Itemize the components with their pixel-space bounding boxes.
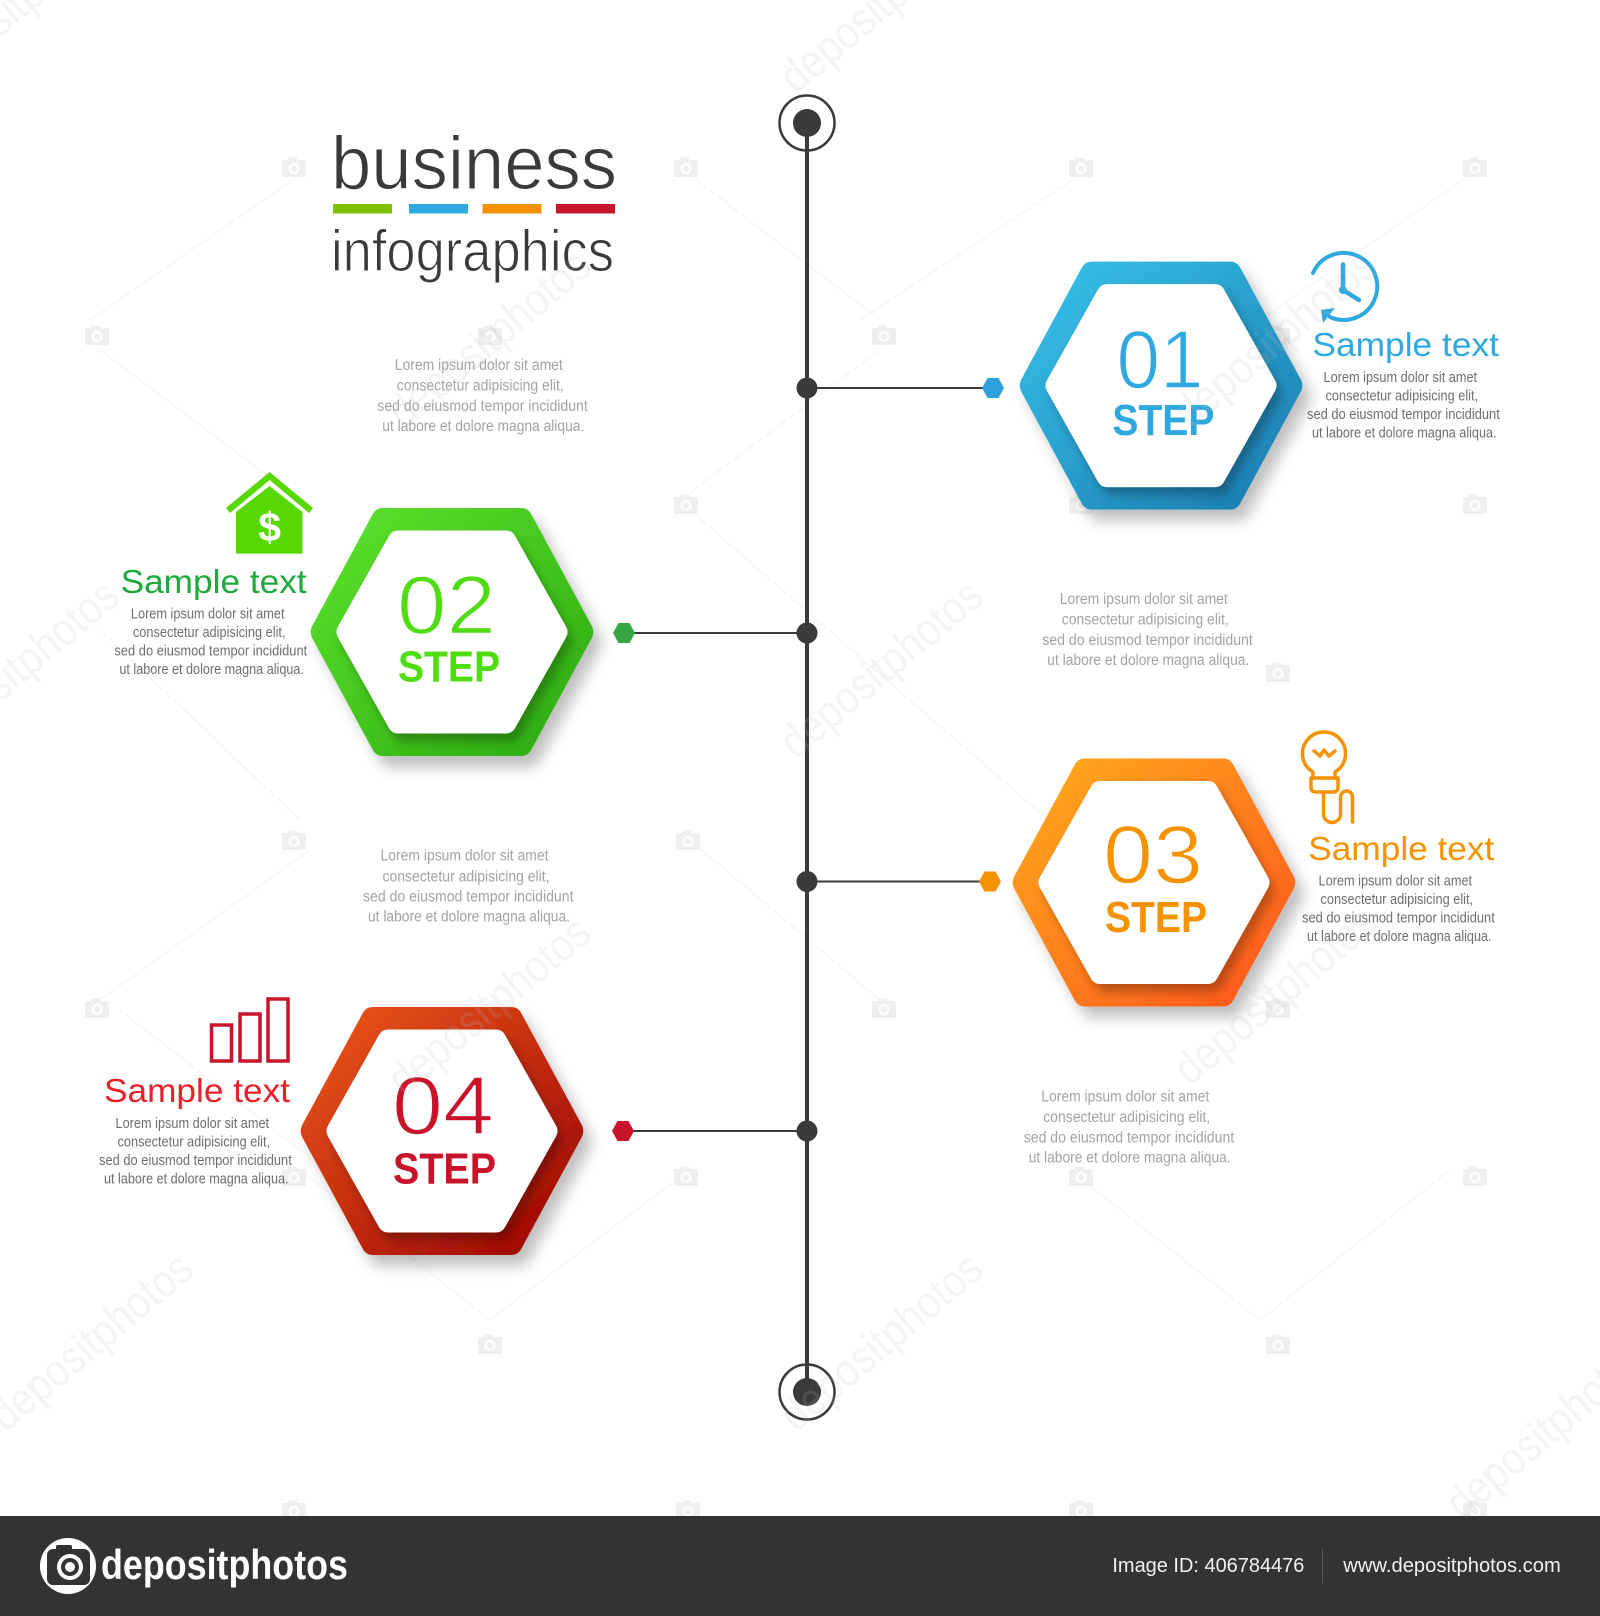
watermark: depositphotos (1163, 238, 1386, 438)
description 1 (1307, 369, 1501, 442)
heading: sample text 2: Sample text (121, 564, 307, 601)
text block: centre 1: ut labore et dolore magna aliqua. (382, 418, 584, 435)
text block: centre 3 (363, 848, 574, 926)
footer logo icon (40, 1538, 96, 1594)
heading: sample text 1: Sample text (1312, 327, 1500, 364)
text block: centre 1 (377, 357, 588, 435)
step label 2: STEP (398, 642, 500, 692)
title: business (331, 121, 617, 205)
number 04: 04 (392, 1059, 494, 1152)
image id: Image ID: 406784476 (1112, 1555, 1304, 1577)
description 3: sed do eiusmod tempor incididunt (1302, 909, 1496, 926)
text block: centre 3: sed do eiusmod tempor incididunt (363, 889, 574, 906)
hexagon: step 2 (311, 508, 593, 756)
watermark: depositphotos (377, 905, 600, 1105)
footer bar (0, 1516, 1600, 1616)
description 4: sed do eiusmod tempor incididunt (99, 1152, 293, 1169)
panel: step 4 (99, 999, 583, 1255)
hexagon: step 4 (301, 1007, 583, 1255)
description 2: ut labore et dolore magna aliqua. (119, 661, 304, 678)
panel: step 2 (114, 472, 593, 756)
panel: step 3 (1013, 732, 1496, 1006)
watermark: depositphotos (769, 568, 992, 768)
description 3 (1302, 872, 1496, 945)
number 01: 01 (1116, 313, 1204, 406)
panel: step 1 (1020, 253, 1501, 510)
text block: centre 1: consectetur adipisicing elit, (397, 378, 564, 395)
text block: centre 1: Lorem ipsum dolor sit amet (395, 357, 563, 374)
number 03: 03 (1103, 808, 1203, 901)
timeline spine (780, 96, 834, 1420)
text block: centre 4: ut labore et dolore magna aliqua. (1029, 1150, 1231, 1166)
text block: centre 1: sed do eiusmod tempor incididunt (377, 398, 588, 415)
title (331, 121, 617, 284)
description 3: ut labore et dolore magna aliqua. (1307, 928, 1492, 945)
connector: step 2 (613, 622, 818, 644)
connector: step 1 (796, 378, 1004, 398)
connector: step 3 (796, 871, 1001, 892)
description 4: Lorem ipsum dolor sit amet (116, 1115, 270, 1132)
step label 4: STEP (393, 1144, 496, 1194)
description 2: sed do eiusmod tempor incididunt (114, 643, 308, 660)
icon: bar chart (212, 999, 288, 1061)
description 1: Lorem ipsum dolor sit amet (1324, 369, 1478, 386)
description 3: consectetur adipisicing elit, (1320, 891, 1473, 908)
text block: centre 4: consectetur adipisicing elit, (1043, 1109, 1210, 1126)
description 3: Lorem ipsum dolor sit amet (1318, 872, 1473, 889)
description 1: sed do eiusmod tempor incididunt (1307, 406, 1501, 423)
text block: centre 3: consectetur adipisicing elit, (382, 868, 550, 885)
watermark: depositphotos (769, 1241, 992, 1441)
description 4: consectetur adipisicing elit, (118, 1134, 270, 1150)
text block: centre 3: Lorem ipsum dolor sit amet (380, 848, 549, 865)
connector: step 4 (612, 1120, 818, 1142)
text block: centre 4: sed do eiusmod tempor incididunt (1024, 1130, 1235, 1146)
text block: centre 2: consectetur adipisicing elit, (1062, 612, 1229, 629)
icon: clock (1313, 253, 1377, 323)
text block: centre 2: Lorem ipsum dolor sit amet (1060, 591, 1228, 608)
hexagon: step 1 (1020, 262, 1302, 510)
number 02: 02 (397, 558, 496, 652)
description 1: ut labore et dolore magna aliqua. (1312, 424, 1496, 442)
top end cap (780, 96, 834, 150)
text block: centre 2: sed do eiusmod tempor incididunt (1042, 632, 1253, 649)
watermark: depositphotos (377, 238, 600, 438)
description 2 (114, 606, 308, 678)
hexagon: step 3 (1013, 758, 1295, 1006)
text block: centre 2: ut labore et dolore magna aliqua. (1047, 652, 1249, 669)
description 2: Lorem ipsum dolor sit amet (131, 606, 285, 623)
heading: sample text 3: Sample text (1308, 831, 1495, 868)
title colour bars (333, 204, 615, 214)
step label 1: STEP (1112, 396, 1214, 445)
icon: house with dollar (226, 472, 313, 554)
text block: centre 3: ut labore et dolore magna aliqua. (368, 909, 570, 926)
text block: centre 4: Lorem ipsum dolor sit amet (1041, 1088, 1210, 1106)
description 4 (99, 1115, 293, 1188)
icon: light bulb (1302, 732, 1352, 822)
step label 3: STEP (1105, 893, 1207, 942)
description 1: consectetur adipisicing elit, (1326, 388, 1478, 404)
bottom end cap (780, 1364, 834, 1420)
title: infographics (331, 219, 614, 284)
watermark: depositphotos (1163, 895, 1386, 1095)
icon: house with dollar: $ (258, 504, 281, 550)
heading: sample text 4: Sample text (104, 1073, 291, 1110)
text block: centre 4 (1024, 1088, 1235, 1166)
website: www.depositphotos.com (1342, 1555, 1561, 1577)
footer logo text: depositphotos (101, 1541, 348, 1588)
description 2: consectetur adipisicing elit, (133, 624, 286, 641)
description 4: ut labore et dolore magna aliqua. (104, 1170, 288, 1188)
text block: centre 2 (1042, 591, 1253, 669)
